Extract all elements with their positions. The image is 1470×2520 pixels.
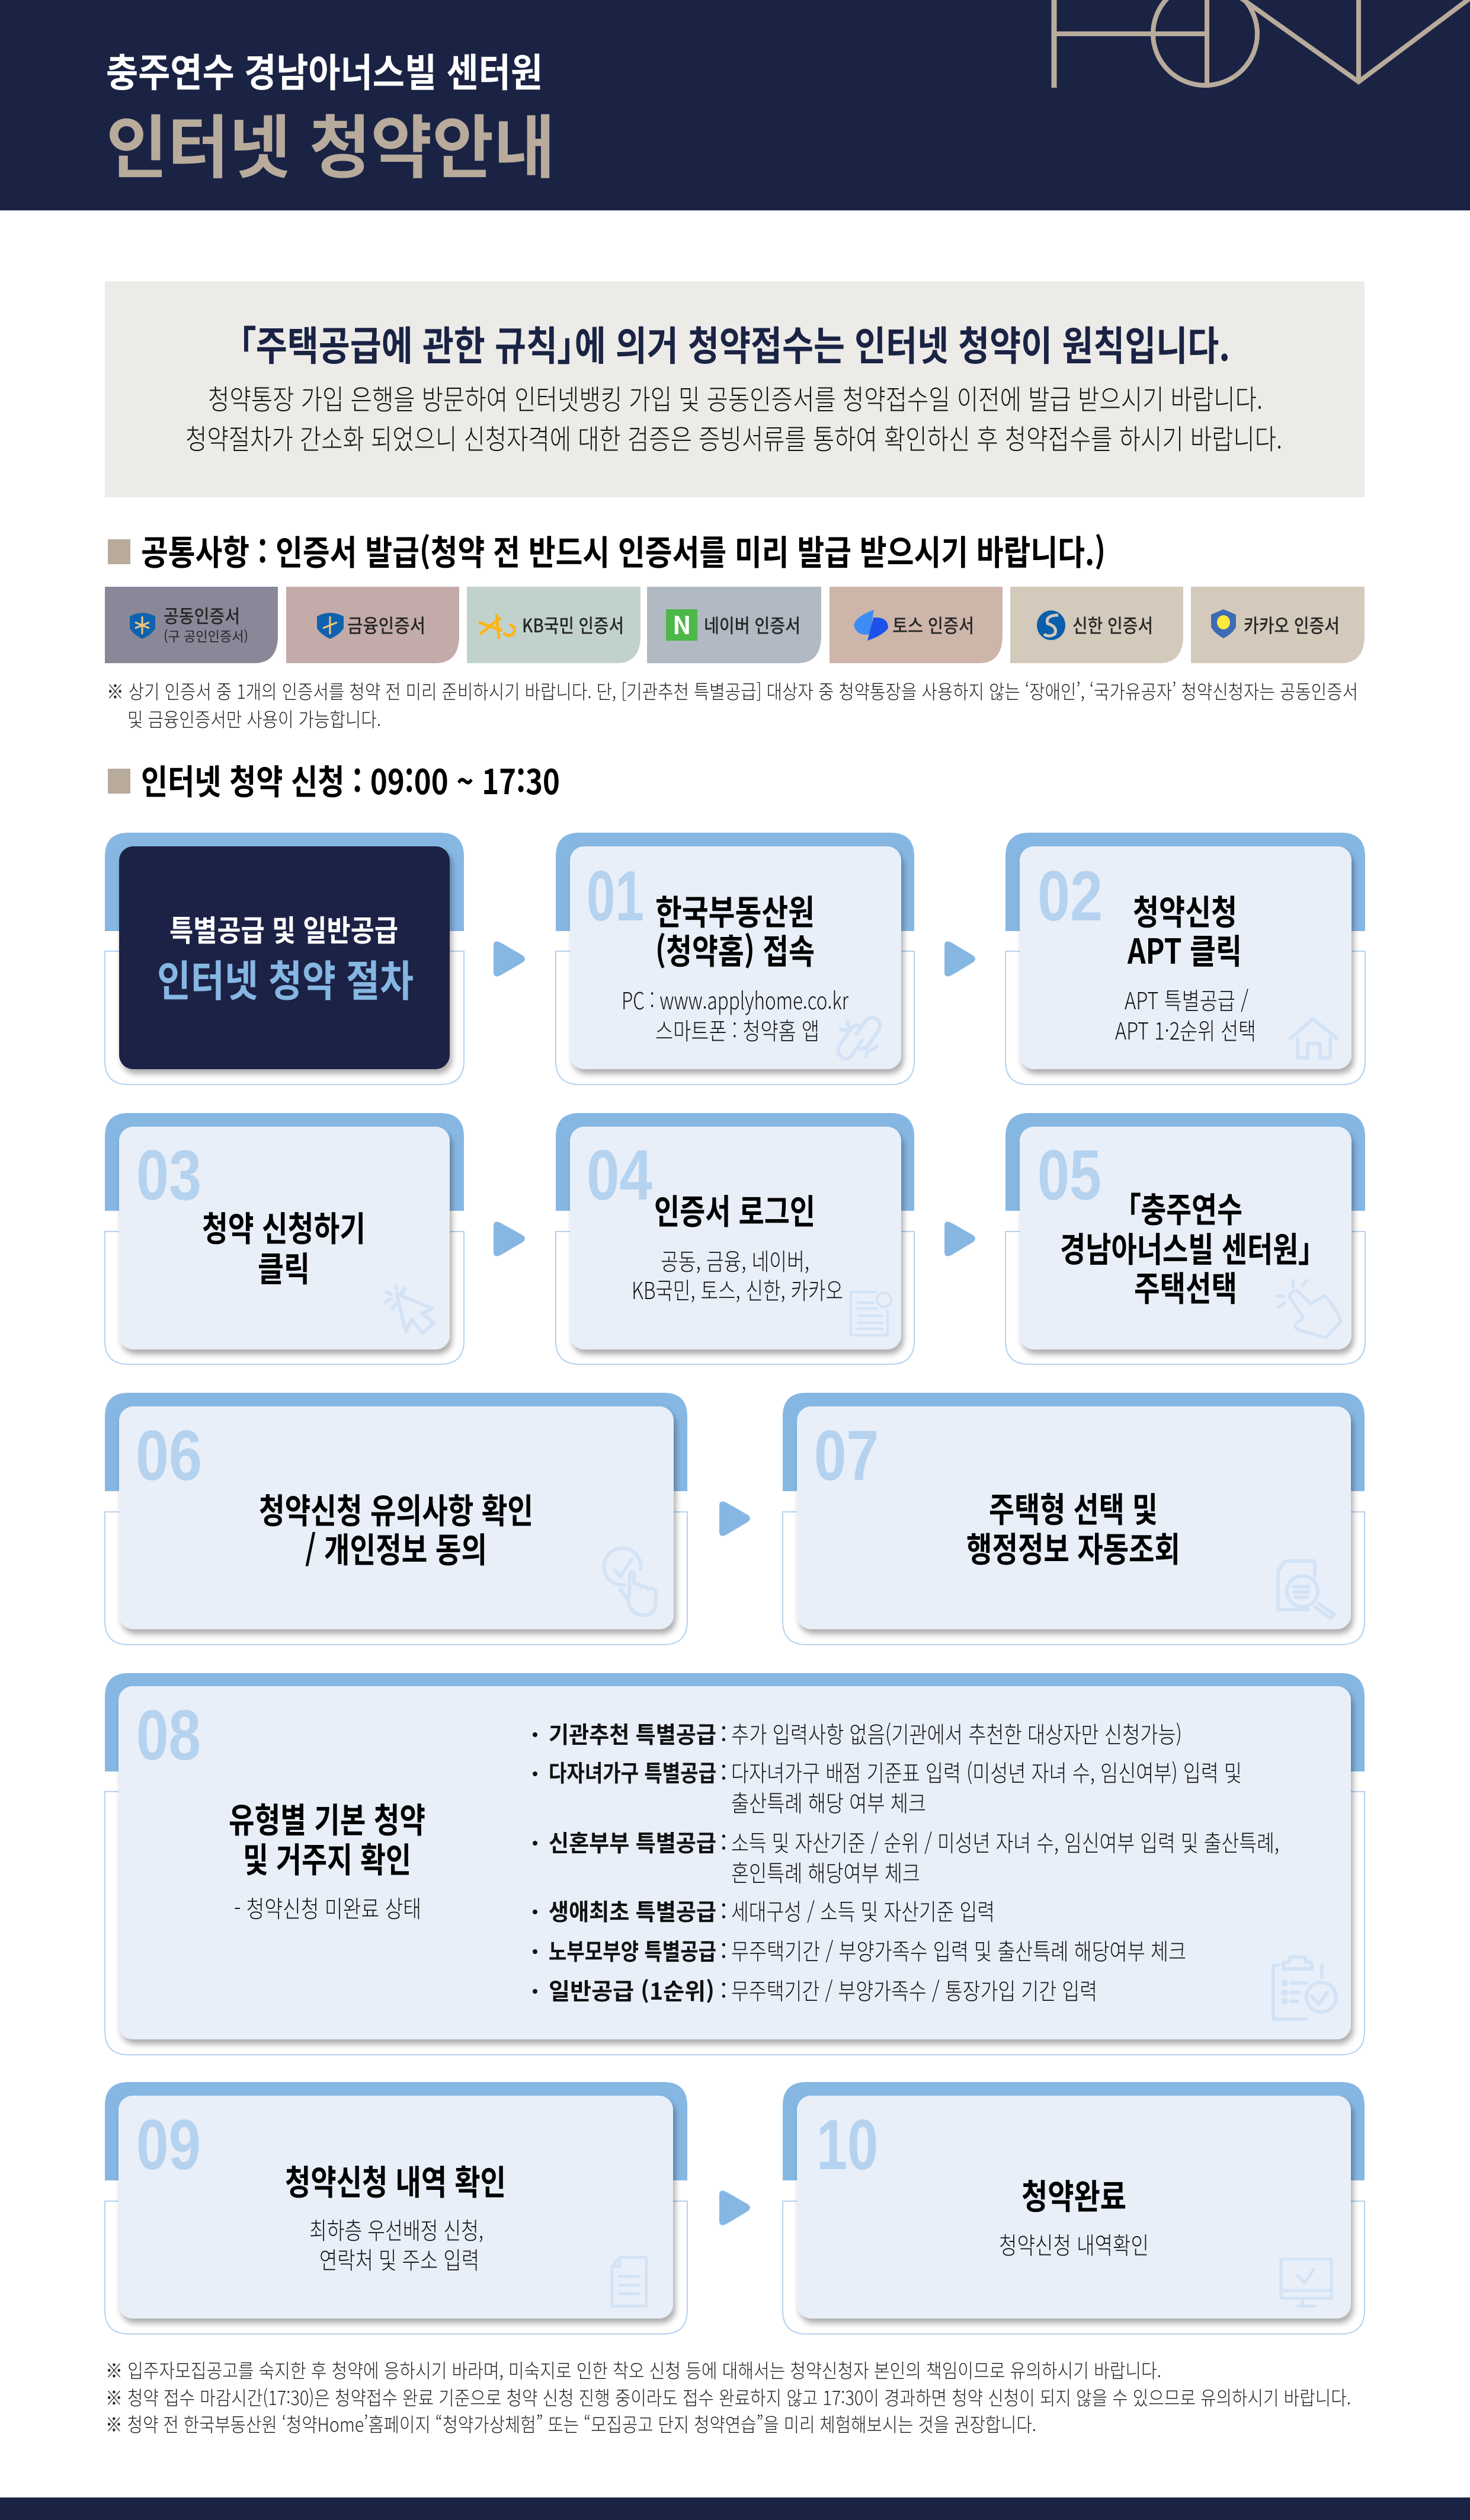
card: step 04 — [556, 1113, 914, 1364]
card: step 06: 청약신청 유의사항 확인 — [259, 1483, 533, 1533]
certificate buttons — [105, 587, 1365, 663]
card: step 09: 연락처 및 주소 입력 — [319, 2241, 479, 2276]
card: step 06 — [105, 1393, 687, 1645]
card: step 05: 05 — [1037, 1136, 1101, 1215]
card: step 05: 「충주연수 — [1127, 1182, 1242, 1232]
button: 네이버 인증서: 네이버 인증서 — [704, 611, 800, 638]
button: 네이버 인증서 — [647, 587, 821, 663]
card: step 10 — [783, 2082, 1365, 2334]
arrow 1 — [494, 941, 525, 977]
icon: link — [838, 1018, 880, 1059]
card: step 03: 클릭 — [258, 1242, 310, 1291]
list of supply types: 추가 입력사항 없음(기관에서 추천한 대상자만 신청가능) — [731, 1717, 1182, 1750]
button: 신한 인증서 — [1010, 587, 1183, 663]
intro line 1: 청약통장 가입 은행을 방문하여 인터넷뱅킹 가입 및 공동인증서를 청약접수일 이전에 발급 받으시기 바랍니다. — [208, 377, 1263, 418]
card: intro navy: 특별공급 및 일반공급 — [169, 907, 398, 950]
card: step 01: (청약홈) 접속 — [655, 924, 815, 974]
icon: document — [612, 2257, 646, 2306]
card: step 08: 유형별 기본 청약 — [229, 1793, 425, 1843]
button: 공동인증서 — [105, 587, 278, 663]
icon: cursor — [386, 1286, 434, 1333]
list of supply types: 노부모부양 특별공급 — [549, 1934, 716, 1967]
project name: 충주연수 경남아너스빌 센터원 — [106, 41, 543, 98]
card: step 09 — [105, 2082, 687, 2334]
button: 금융인증서: 금융인증서 — [347, 611, 425, 638]
intro heading: 「주택공급에 관한 규칙」에 의거 청약접수는 인터넷 청약이 원칙입니다. — [239, 314, 1230, 372]
arrow 2 — [944, 941, 975, 977]
card: step 09: 청약신청 내역 확인 — [285, 2155, 506, 2205]
arrow 3 — [494, 1221, 525, 1256]
card: step 05: 경남아너스빌 센터원」 — [1060, 1222, 1312, 1272]
card: step 07 — [783, 1393, 1365, 1645]
card: step 08: 08 — [136, 1696, 201, 1775]
list of supply types: 소득 및 자산기준 / 순위 / 미성년 자녀 수, 임신여부 입력 및 출산특례, — [731, 1825, 1279, 1859]
card: step 10: 청약완료 — [1021, 2169, 1126, 2219]
button: KB국민 인증서 — [467, 587, 640, 663]
button: 카카오 인증서 — [1191, 587, 1365, 663]
list of supply types: 신혼부부 특별공급 — [549, 1825, 716, 1859]
card: step 02: APT 특별공급 / — [1125, 982, 1248, 1016]
footer band — [0, 2497, 1470, 2520]
list of supply types: 출산특례 해당 여부 체크 — [731, 1786, 926, 1819]
card: step 06: 06 — [136, 1416, 202, 1495]
button: 토스 인증서 — [830, 587, 1003, 663]
card: step 02: 02 — [1037, 856, 1103, 936]
button: 신한 인증서: 신한 인증서 — [1072, 611, 1153, 638]
icon: clipboard — [1273, 1957, 1336, 2019]
list of supply types: : — [720, 1825, 727, 1859]
list of supply types: 세대구성 / 소득 및 자산기준 입력 — [731, 1894, 995, 1927]
card: step 04: 공동, 금융, 네이버, — [661, 1243, 809, 1277]
list of supply types: 다자녀가구 배점 기준표 입력 (미성년 자녀 수, 임신여부) 입력 및 — [731, 1755, 1242, 1789]
arrow 5 — [719, 1501, 750, 1536]
card: intro navy: 인터넷 청약 절차 — [157, 946, 414, 1009]
icon: document search — [1278, 1561, 1334, 1618]
card: step 01 — [556, 833, 914, 1085]
certificate note: 및 금융인증서만 사용이 가능합니다. — [127, 704, 381, 733]
card: step 04: 인증서 로그인 — [654, 1184, 815, 1234]
intro panel — [105, 282, 1365, 497]
button: 네이버 인증서: N — [672, 606, 691, 642]
certificate note — [107, 676, 1358, 733]
icon: certificate — [851, 1292, 891, 1335]
list of supply types — [533, 1717, 1279, 2007]
header band — [0, 0, 1470, 210]
card: step 01: PC : www.applyhome.co.kr — [622, 982, 848, 1016]
button: 공동인증서: (구 공인인증서) — [164, 625, 248, 645]
list of supply types: 일반공급 (1순위) — [549, 1974, 715, 2007]
card: step 02: APT 1·2순위 선택 — [1115, 1012, 1256, 1047]
card: step 04: KB국민, 토스, 신한, 카카오 — [632, 1272, 843, 1306]
list of supply types: 기관추천 특별공급 — [549, 1717, 716, 1750]
icon: check and hand — [604, 1548, 656, 1615]
card: step 09: 최하층 우선배정 신청, — [309, 2212, 483, 2246]
list of supply types: : — [720, 1934, 727, 1967]
card: step 03 — [105, 1113, 464, 1364]
card: step 06: / 개인정보 동의 — [305, 1523, 487, 1572]
list of supply types: : — [720, 1755, 727, 1789]
card: step 07: 행정정보 자동조회 — [966, 1522, 1180, 1572]
icon: house — [1290, 1019, 1337, 1058]
card: step 05 — [1005, 1113, 1365, 1364]
footer notes — [105, 2355, 1351, 2438]
arrow 4 — [944, 1221, 975, 1256]
footer notes: ※ 입주자모집공고를 숙지한 후 청약에 응하시기 바라며, 미숙지로 인한 착오 신청 등에 대해서는 청약신청자 본인의 책임이므로 유의하시기 바랍니다. — [105, 2355, 1161, 2384]
icon: magnifier — [1287, 1576, 1318, 1607]
list of supply types: : — [720, 1974, 727, 2007]
card: intro navy — [105, 833, 464, 1085]
card: step 01: 한국부동산원 — [655, 885, 815, 935]
button: 공동인증서: 공동인증서 — [164, 602, 240, 628]
card: step 05: 주택선택 — [1134, 1261, 1237, 1311]
list of supply types: 다자녀가구 특별공급 — [549, 1755, 716, 1789]
card: step 10: 10 — [816, 2105, 878, 2185]
button: 토스 인증서: 토스 인증서 — [892, 611, 974, 638]
main title: 인터넷 청약안내 — [106, 92, 555, 192]
section heading: certificates: 공통사항 : 인증서 발급(청약 전 반드시 인증서를 미리 발급 받으시기 바랍니다.) — [141, 525, 1106, 575]
card: step 03: 청약 신청하기 — [202, 1201, 366, 1251]
card: step 02: APT 클릭 — [1127, 924, 1242, 974]
arrow 6 — [719, 2190, 750, 2225]
card: step 04: 04 — [587, 1136, 652, 1215]
intro line 2: 청약절차가 간소화 되었으니 신청자격에 대한 검증은 증빙서류를 통하여 확인하신 후 청약접수를 하시기 바랍니다. — [185, 417, 1282, 458]
card: step 02 — [1005, 833, 1365, 1085]
list of supply types: : — [720, 1894, 727, 1927]
button: KB국민 인증서: KB국민 인증서 — [522, 611, 624, 638]
list of supply types: : — [720, 1717, 727, 1750]
list of supply types: 무주택기간 / 부양가족수 입력 및 출산특례 해당여부 체크 — [731, 1934, 1186, 1967]
card: step 02: 청약신청 — [1133, 885, 1237, 935]
list of supply types: 혼인특례 해당여부 체크 — [731, 1856, 920, 1889]
card: step 01: 스마트폰 : 청약홈 앱 — [655, 1012, 819, 1047]
footer notes: ※ 청약 전 한국부동산원 ‘청약Home’홈페이지 “청약가상체험” 또는 “모집공고 단지 청약연습”을 미리 체험해보시는 것을 권장합니다. — [105, 2409, 1036, 2438]
card: step 08: - 청약신청 미완료 상태 — [234, 1890, 421, 1924]
card: step 09: 09 — [136, 2105, 201, 2185]
button: 금융인증서 — [286, 587, 459, 663]
section heading: application hours: 인터넷 청약 신청 : 09:00 ~ 17:30 — [141, 754, 560, 804]
card: step 07: 07 — [814, 1416, 879, 1495]
icon: tapping hand — [1277, 1280, 1341, 1338]
card: step 10: 청약신청 내역확인 — [999, 2227, 1149, 2261]
list of supply types: 무주택기간 / 부양가족수 / 통장가입 기간 입력 — [731, 1974, 1097, 2007]
card: step 07: 주택형 선택 및 — [989, 1482, 1158, 1532]
header logo lines — [1054, 0, 1470, 88]
button: 카카오 인증서: 카카오 인증서 — [1244, 611, 1340, 638]
card: step 08: 및 거주지 확인 — [243, 1833, 411, 1882]
icon: monitor check — [1281, 2259, 1331, 2306]
list of supply types: 생애최초 특별공급 — [549, 1894, 716, 1927]
card: step 08 — [105, 1673, 1365, 2055]
card: step 03: 03 — [136, 1136, 201, 1215]
card: step 01: 01 — [587, 856, 644, 936]
